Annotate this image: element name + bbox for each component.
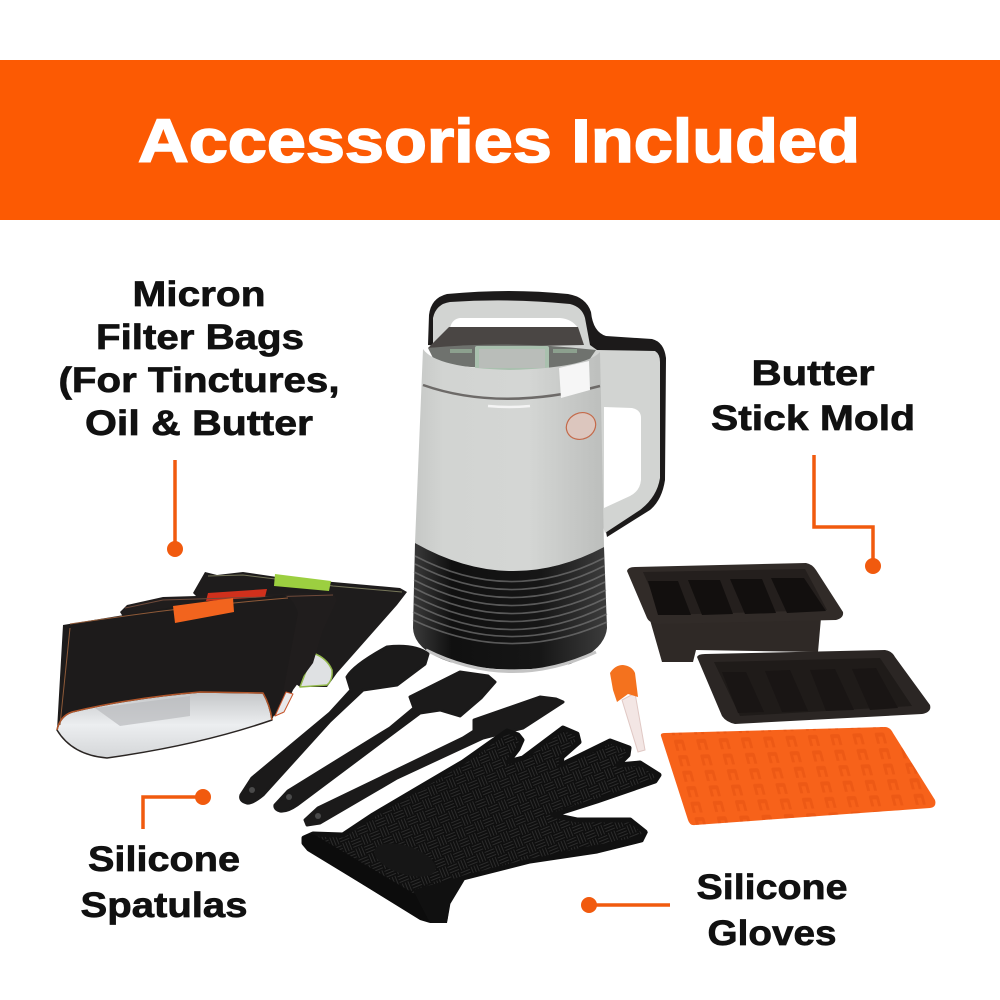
- ribbed black base: [413, 543, 607, 672]
- product: dropper: [610, 665, 645, 752]
- label: [58, 275, 340, 443]
- machine body: [415, 349, 604, 571]
- leader line: [167, 460, 183, 557]
- white sticker: [559, 361, 590, 398]
- spatula 3: [305, 697, 563, 825]
- orange gummy mold: [661, 727, 935, 825]
- callout: silicone spatulas: [80, 789, 248, 925]
- control panel: [428, 344, 596, 370]
- front bag with mesh: [57, 595, 298, 758]
- label: Oil & Butter: [85, 404, 313, 443]
- product: silicone spatulas: [241, 646, 563, 825]
- label: [711, 354, 915, 438]
- machine handle grey: [433, 300, 660, 533]
- callout: butter stick mold: [711, 354, 915, 574]
- spatula 2: [275, 672, 495, 811]
- product: micron filter bags: [57, 572, 407, 758]
- callout: silicone gloves: [581, 868, 848, 953]
- machine handle opening: [604, 407, 641, 508]
- mold base: [627, 563, 843, 662]
- label: Butter: [752, 354, 875, 393]
- leader line: [581, 897, 670, 913]
- label: (For Tinctures,: [58, 361, 340, 400]
- label: Micron: [132, 275, 266, 314]
- label: [80, 840, 248, 925]
- glove palm pad: [370, 837, 440, 883]
- label: Silicone: [88, 840, 240, 879]
- leader line: [143, 789, 211, 829]
- glove cuff: [302, 834, 430, 923]
- label: Gloves: [708, 914, 836, 953]
- product: soup maker machine: [413, 291, 666, 672]
- label: Stick Mold: [711, 399, 915, 438]
- label: [696, 868, 848, 953]
- product: butter stick mold: [627, 563, 935, 825]
- machine handle black edge: [428, 291, 666, 537]
- label: Filter Bags: [96, 318, 304, 357]
- back bag, green tag: [193, 572, 407, 687]
- leader line: [814, 455, 881, 574]
- mold lid: [697, 650, 930, 724]
- middle bag, red tag: [120, 589, 337, 717]
- red seal: [562, 408, 600, 444]
- title banner: [0, 60, 1000, 220]
- machine top panel: [428, 327, 584, 348]
- callout: filter bags: [58, 275, 340, 557]
- label: Spatulas: [80, 886, 248, 925]
- title: Accessories Included: [138, 107, 860, 175]
- spatula 1: [241, 646, 428, 803]
- product: silicone gloves: [302, 728, 659, 923]
- label: Silicone: [696, 868, 848, 907]
- metal band: [423, 385, 600, 399]
- orange tag: [173, 598, 234, 623]
